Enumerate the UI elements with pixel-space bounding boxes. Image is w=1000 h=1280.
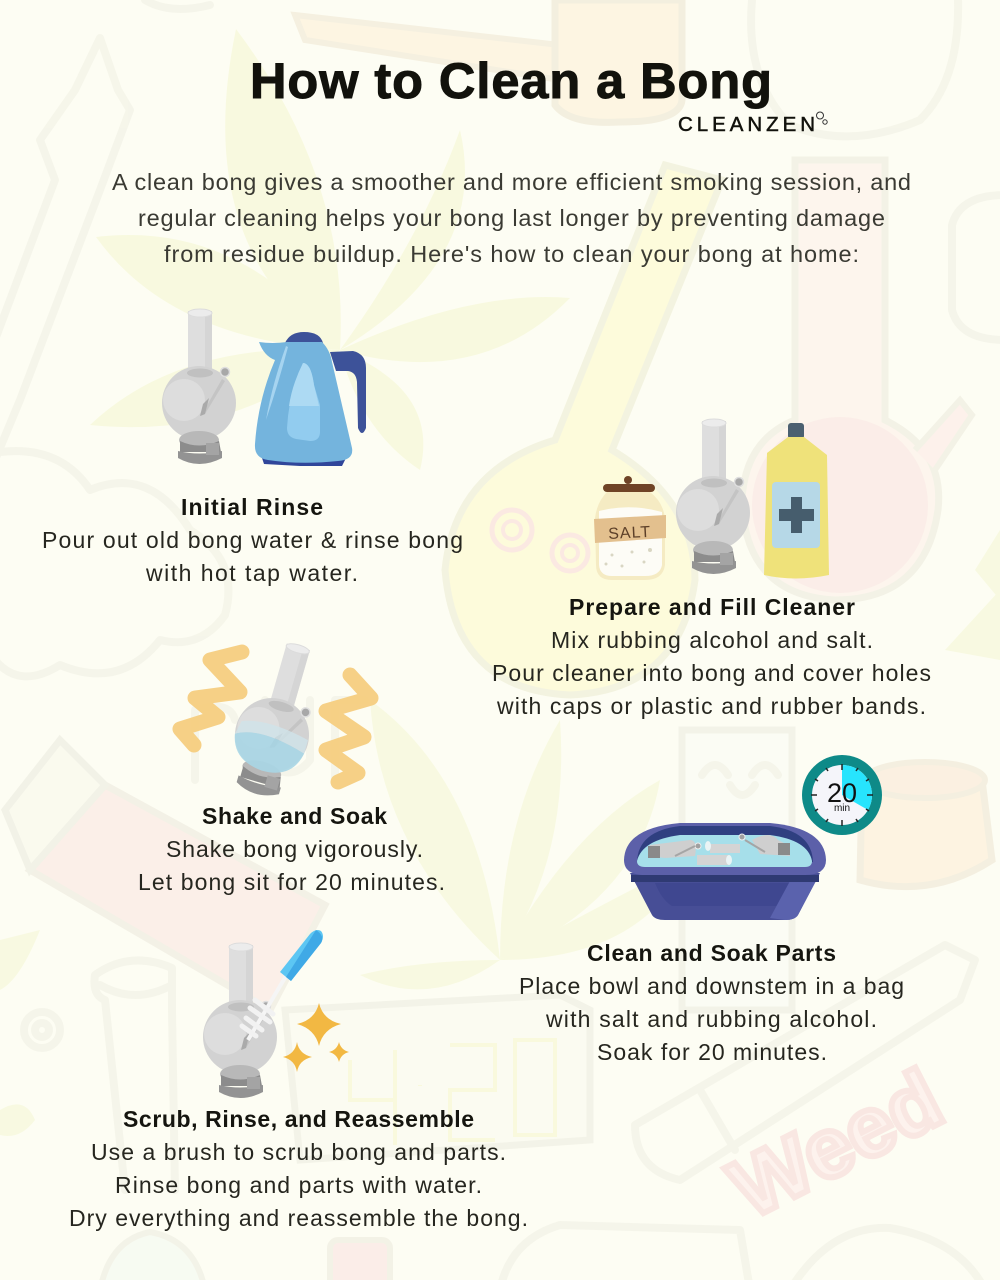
step 1 text: initial rinse: Pour out old bong water & rinse bong <box>42 527 463 553</box>
background: joint <box>635 945 975 1180</box>
step 2 text: prepare and fill cleaner: Pour cleaner into bong and cover holes <box>492 660 931 686</box>
background: top pipe <box>295 0 682 122</box>
icon: salt jar <box>594 476 666 580</box>
step 1 text: initial rinse: Initial Rinse <box>181 494 323 520</box>
step 3 text: shake and soak <box>138 803 445 895</box>
background: cloud <box>0 451 228 676</box>
background: orange roll <box>860 762 992 887</box>
step 2 illustration: salt, bong, alcohol <box>594 419 829 580</box>
background: puff lettering <box>195 700 365 780</box>
icon: bong <box>203 943 277 1098</box>
background: right box <box>952 195 1000 340</box>
step 2 text: prepare and fill cleaner: Mix rubbing alcohol and salt. <box>551 627 873 653</box>
step 5 text: scrub, rinse, and reassemble: Scrub, Rinse, and Reassemble <box>123 1106 474 1132</box>
icon: bong <box>676 419 750 574</box>
icon: 20 minute timer <box>802 755 882 835</box>
background: top left character <box>0 38 130 460</box>
step 4 text: clean and soak parts <box>519 940 904 1065</box>
icon: bong <box>162 309 236 464</box>
icon: alcohol bottle <box>764 423 829 578</box>
background: top circle <box>145 0 210 9</box>
background: digital clock <box>285 995 590 1160</box>
icon: tilted bong with water <box>220 634 333 804</box>
icon: sparkles <box>283 1003 349 1072</box>
step 1 text: initial rinse <box>42 494 463 586</box>
background: cannabis leaf lower <box>360 700 690 989</box>
step 2 text: prepare and fill cleaner <box>492 594 931 719</box>
step 3 text: shake and soak: Shake and Soak <box>202 803 387 829</box>
background: yellow bong <box>445 165 722 695</box>
intro paragraph: from residue buildup. Here's how to clean your bong at home: <box>164 241 859 267</box>
logo: Cleanzen: CLEANZEN <box>678 113 815 136</box>
icon: bottle brush <box>242 930 323 1040</box>
icon: shake zigzags <box>180 652 371 782</box>
background: weed lettering: Weed <box>715 1051 956 1236</box>
step 4 text: clean and soak parts: Clean and Soak Parts <box>587 940 836 966</box>
icon: salt jar: SALT <box>608 524 651 543</box>
icon: kettle <box>255 332 366 466</box>
step 4 text: clean and soak parts: with salt and rubbing alcohol. <box>545 1006 877 1032</box>
step 2 text: prepare and fill cleaner: Prepare and Fill Cleaner <box>569 594 855 620</box>
step 4 text: clean and soak parts: Place bowl and downstem in a bag <box>519 973 904 999</box>
step 3 illustration: shaking bong <box>180 634 371 804</box>
step 4 text: clean and soak parts: Soak for 20 minutes. <box>597 1039 827 1065</box>
background: pink lighter <box>5 740 325 1010</box>
background: glass jar with face <box>682 730 792 1010</box>
step 5 text: scrub, rinse, and reassemble: Dry everything and reassemble the bong. <box>69 1205 528 1231</box>
step 5 text: scrub, rinse, and reassemble <box>69 1106 528 1231</box>
step 5 text: scrub, rinse, and reassemble: Rinse bong and parts with water. <box>115 1172 482 1198</box>
step 5 illustration: brush, bong and sparkles <box>203 930 349 1098</box>
title: How to Clean a Bong <box>250 52 772 109</box>
step 5 text: scrub, rinse, and reassemble: Use a brush to scrub bong and parts. <box>91 1139 506 1165</box>
intro paragraph: A clean bong gives a smoother and more efficient smoking session, and <box>112 169 911 195</box>
step 3 text: shake and soak: Let bong sit for 20 minutes. <box>138 869 445 895</box>
background: pink bong <box>742 160 972 600</box>
icon: tub <box>624 823 826 920</box>
background: cannabis leaf upper <box>90 29 570 470</box>
step 3 text: shake and soak: Shake bong vigorously. <box>166 836 423 862</box>
step 1 illustration: bong and kettle <box>162 309 366 466</box>
background: top right apple <box>751 0 958 136</box>
icon: 20 minute timer: 20 <box>827 778 857 808</box>
step 4 illustration: soaking tub and timer <box>624 755 882 920</box>
step 1 text: initial rinse: with hot tap water. <box>145 560 358 586</box>
background: glass tube <box>94 960 175 1190</box>
background: bottom doodles <box>0 530 1000 1280</box>
background: swirl <box>24 1012 60 1048</box>
sub: submerged bong parts <box>648 834 790 865</box>
icon: 20 minute timer: min <box>834 803 850 814</box>
step 2 text: prepare and fill cleaner: with caps or plastic and rubber bands. <box>496 693 926 719</box>
intro paragraph: regular cleaning helps your bong last longer by preventing damage <box>138 205 885 231</box>
intro paragraph <box>112 169 911 267</box>
